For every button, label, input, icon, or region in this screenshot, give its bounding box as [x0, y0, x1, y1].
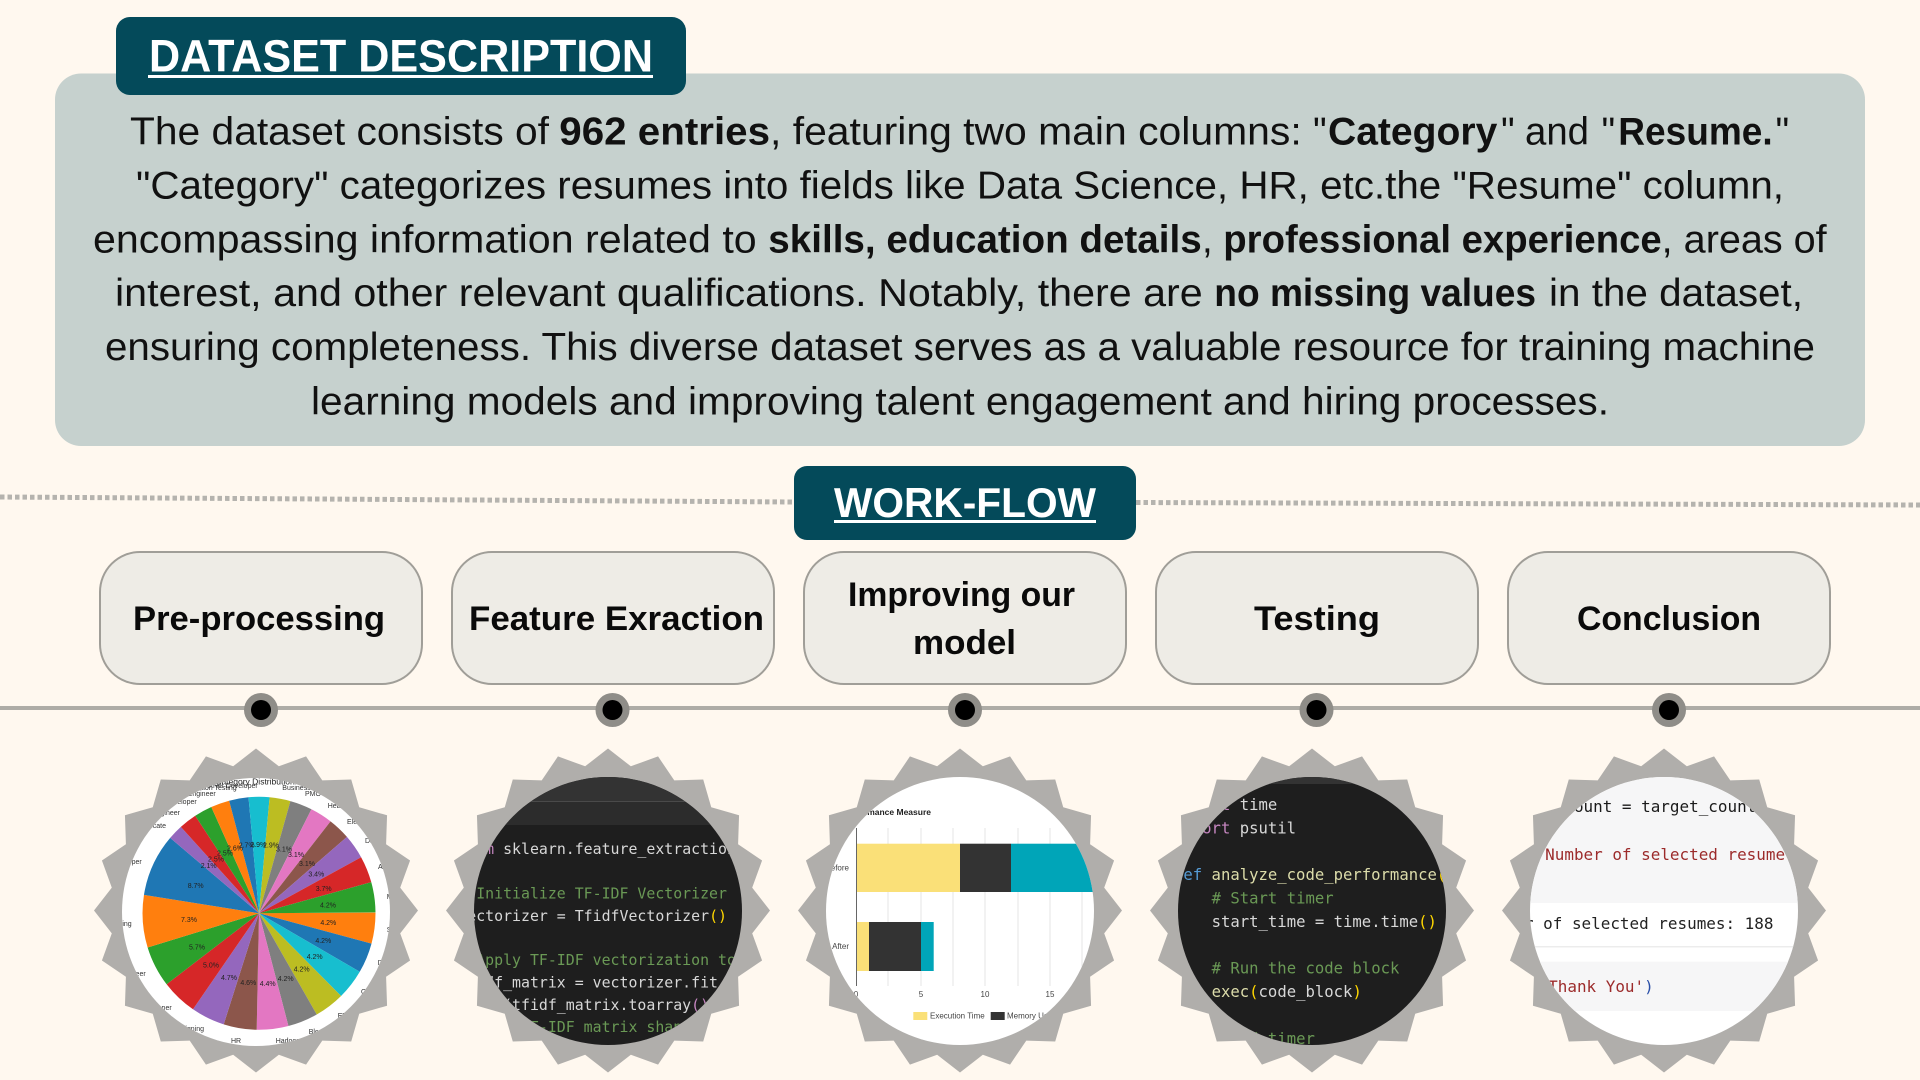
- paragraph text: interest, and other relevant qualifications. Notably, there are: [115, 272, 1203, 315]
- paragraph text: professional experience: [1223, 218, 1662, 261]
- category labels: Python Developer: [116, 1005, 172, 1012]
- category labels: Network Security Engineer: [133, 791, 216, 798]
- category labels: Database: [365, 838, 395, 845]
- percentage labels: 4.7%: [221, 975, 237, 982]
- axis labels: 10: [981, 990, 990, 999]
- paragraph text: and: [1525, 110, 1589, 154]
- code text: from sklearn.feature_extraction: [458, 840, 736, 858]
- category labels: Web Designing: [157, 1026, 204, 1033]
- percentage labels: 3.1%: [276, 846, 292, 854]
- code text: selected_count = target_count: [1478, 797, 1756, 816]
- code text: [1530, 800, 1784, 994]
- percentage labels: [181, 842, 336, 988]
- category labels: Hadoop: [276, 1038, 300, 1045]
- step: pre-processing: Pre-processing: [133, 600, 385, 638]
- paragraph text: The dataset consists of: [130, 110, 549, 154]
- percentage labels: 2.9%: [250, 842, 266, 849]
- category labels: Category Distribution: [215, 776, 295, 786]
- step: improving our model: [804, 552, 1126, 684]
- badge: performance bar chart: [798, 748, 1122, 1072]
- gridlines: [888, 828, 1082, 986]
- category labels: Java Developer: [93, 859, 142, 866]
- percentage labels: 3.7%: [316, 886, 332, 893]
- axis labels: Before: [825, 864, 850, 872]
- percentage labels: 4.2%: [294, 966, 310, 974]
- paragraph text: [93, 110, 1827, 424]
- percentage labels: 4.2%: [315, 938, 331, 945]
- code text: [474, 842, 734, 1032]
- step: feature extraction: Feature Exraction: [469, 600, 764, 638]
- percentage labels: 3.1%: [299, 861, 315, 868]
- paragraph text: in the dataset,: [1549, 272, 1803, 315]
- badge: pie chart of category distribution: [94, 748, 418, 1072]
- category labels: DotNet Developer: [202, 783, 258, 790]
- category labels: Mechanical Engineer: [387, 894, 453, 901]
- code text: def analyze_code_performance(: [1174, 866, 1446, 884]
- code text: print("Number of selected resume: [1478, 845, 1785, 864]
- code text: Number of selected resumes: 188: [1476, 914, 1773, 933]
- category labels: Business Analyst: [282, 785, 335, 792]
- step: pre-processing: [100, 552, 422, 684]
- category labels: Testing: [110, 921, 132, 928]
- paragraph text: ,: [1202, 218, 1213, 261]
- legend: Execution Time: [930, 1012, 985, 1021]
- category labels: ETL Developer: [338, 1013, 385, 1020]
- heading: dataset description: [116, 17, 686, 95]
- paragraph text: ": [1602, 110, 1615, 154]
- pie wedges: [201, 855, 317, 972]
- category labels: Arts: [378, 864, 391, 871]
- axis labels: [825, 864, 1055, 999]
- percentage labels: 2.7%: [239, 842, 255, 850]
- step: feature extraction: [452, 552, 774, 684]
- step: testing: Testing: [1254, 600, 1380, 638]
- percentage labels: 7.3%: [181, 917, 197, 924]
- percentage labels: 2.9%: [263, 842, 279, 850]
- percentage labels: 4.4%: [260, 981, 276, 988]
- heading: work-flow: WORK-FLOW: [834, 479, 1096, 526]
- percentage labels: 4.2%: [320, 902, 336, 910]
- code text: print('Thank You'): [1481, 977, 1654, 996]
- code text: start_time = time.time(): [1212, 913, 1437, 931]
- paragraph text: skills, education details: [768, 218, 1202, 261]
- step: improving our model: Improving our: [848, 576, 1075, 614]
- category labels: Civil Engineer: [137, 810, 181, 817]
- step: testing: [1156, 552, 1478, 684]
- badge: code performance screenshot: [1150, 748, 1474, 1072]
- code text: # Start timer: [1212, 890, 1334, 908]
- paragraph text: , featuring two main columns:: [770, 110, 1302, 154]
- code text: exec(code_block): [1212, 983, 1362, 1001]
- paragraph text: learning models and improving talent engagement and hiring processes.: [311, 380, 1609, 424]
- category labels: Automation Testing: [177, 785, 237, 792]
- code text: # Apply TF-IDF vectorization to: [458, 951, 736, 969]
- chart title: Performance Measure: [842, 807, 931, 817]
- percentage labels: 2.5%: [217, 850, 233, 858]
- percentage labels: 2.6%: [227, 846, 243, 852]
- paragraph text: 962 entries: [559, 110, 770, 154]
- paragraph text: ": [1776, 110, 1789, 154]
- percentage labels: 2.1%: [201, 863, 217, 870]
- badge: TF-IDF code screenshot: [446, 748, 770, 1072]
- percentage labels: 4.2%: [307, 954, 323, 961]
- percentage labels: 2.5%: [208, 856, 224, 864]
- step: conclusion: [1508, 552, 1830, 684]
- paragraph text: Category: [1328, 110, 1498, 154]
- percentage labels: 4.2%: [320, 920, 336, 927]
- percentage labels: 4.6%: [240, 980, 256, 987]
- percentage labels: 3.1%: [288, 852, 304, 859]
- category labels: Operations Manager: [361, 989, 425, 996]
- code text: # Initialize TF-IDF Vectorizer: [458, 884, 727, 902]
- percentage labels: 8.7%: [188, 883, 204, 890]
- paragraph text: Resume.: [1618, 110, 1773, 154]
- heading: dataset description: DATASET DESCRIPTION: [149, 30, 653, 82]
- category labels: HR: [231, 1038, 241, 1045]
- legend: [913, 1012, 1046, 1020]
- paragraph text: ": [1313, 110, 1327, 154]
- category labels: Data Science: [378, 960, 419, 967]
- paragraph text: ": [1501, 110, 1515, 154]
- category labels: Sales: [387, 927, 405, 934]
- step: improving our model: model: [913, 624, 1016, 662]
- code text: # End timer: [1212, 1030, 1315, 1048]
- code text: tfidf_matrix = vectorizer.fit_transform: [458, 974, 808, 992]
- axis labels: 15: [1046, 990, 1055, 999]
- category labels: [122, 778, 390, 1043]
- paragraph text: "Category" categorizes resumes into fields like Data Science, HR, etc.the "Resume" column,: [136, 164, 1784, 207]
- percentage labels: 4.2%: [278, 976, 294, 983]
- code text: print(tfidf_matrix.toarray(): [458, 996, 709, 1014]
- code text: print("TF-IDF matrix shape: [458, 1018, 691, 1036]
- category labels: Electrical Engineering: [347, 819, 415, 826]
- category labels: DevOps Engineer: [90, 971, 146, 978]
- percentage labels: 5.7%: [189, 944, 205, 952]
- code text: import time: [1174, 796, 1277, 814]
- category labels: Advocate: [137, 823, 166, 830]
- step: conclusion: Conclusion: [1577, 600, 1761, 638]
- stacked bars: [856, 844, 1101, 971]
- category labels: Blockchain: [309, 1029, 343, 1036]
- category labels: PMO: [305, 791, 322, 798]
- paragraph text: ensuring completeness. This diverse dataset serves as a valuable resource for training machine: [105, 326, 1815, 369]
- percentage labels: 5.0%: [203, 962, 219, 970]
- axis labels: 5: [919, 990, 924, 999]
- category labels: Health and fitness: [328, 803, 384, 810]
- axis labels: 0: [854, 990, 859, 999]
- category labels: SAP Developer: [149, 799, 197, 806]
- panel: dataset description: [55, 74, 1865, 446]
- code text: # Run the code block: [1212, 960, 1400, 978]
- percentage labels: 3.4%: [308, 872, 324, 878]
- paragraph text: , areas of: [1662, 218, 1827, 261]
- legend: Memory Usage: [1007, 1012, 1062, 1021]
- timeline with step markers: [0, 693, 1920, 727]
- code text: vectorizer = TfidfVectorizer(): [458, 907, 727, 925]
- code text: import psutil: [1174, 820, 1296, 838]
- code text: [1174, 796, 1446, 1048]
- paragraph text: encompassing information related to: [93, 218, 757, 261]
- paragraph text: no missing values: [1214, 272, 1536, 315]
- badge: conclusion code screenshot: [1476, 748, 1826, 1072]
- heading: work-flow: [794, 466, 1136, 540]
- axis labels: After: [832, 942, 849, 951]
